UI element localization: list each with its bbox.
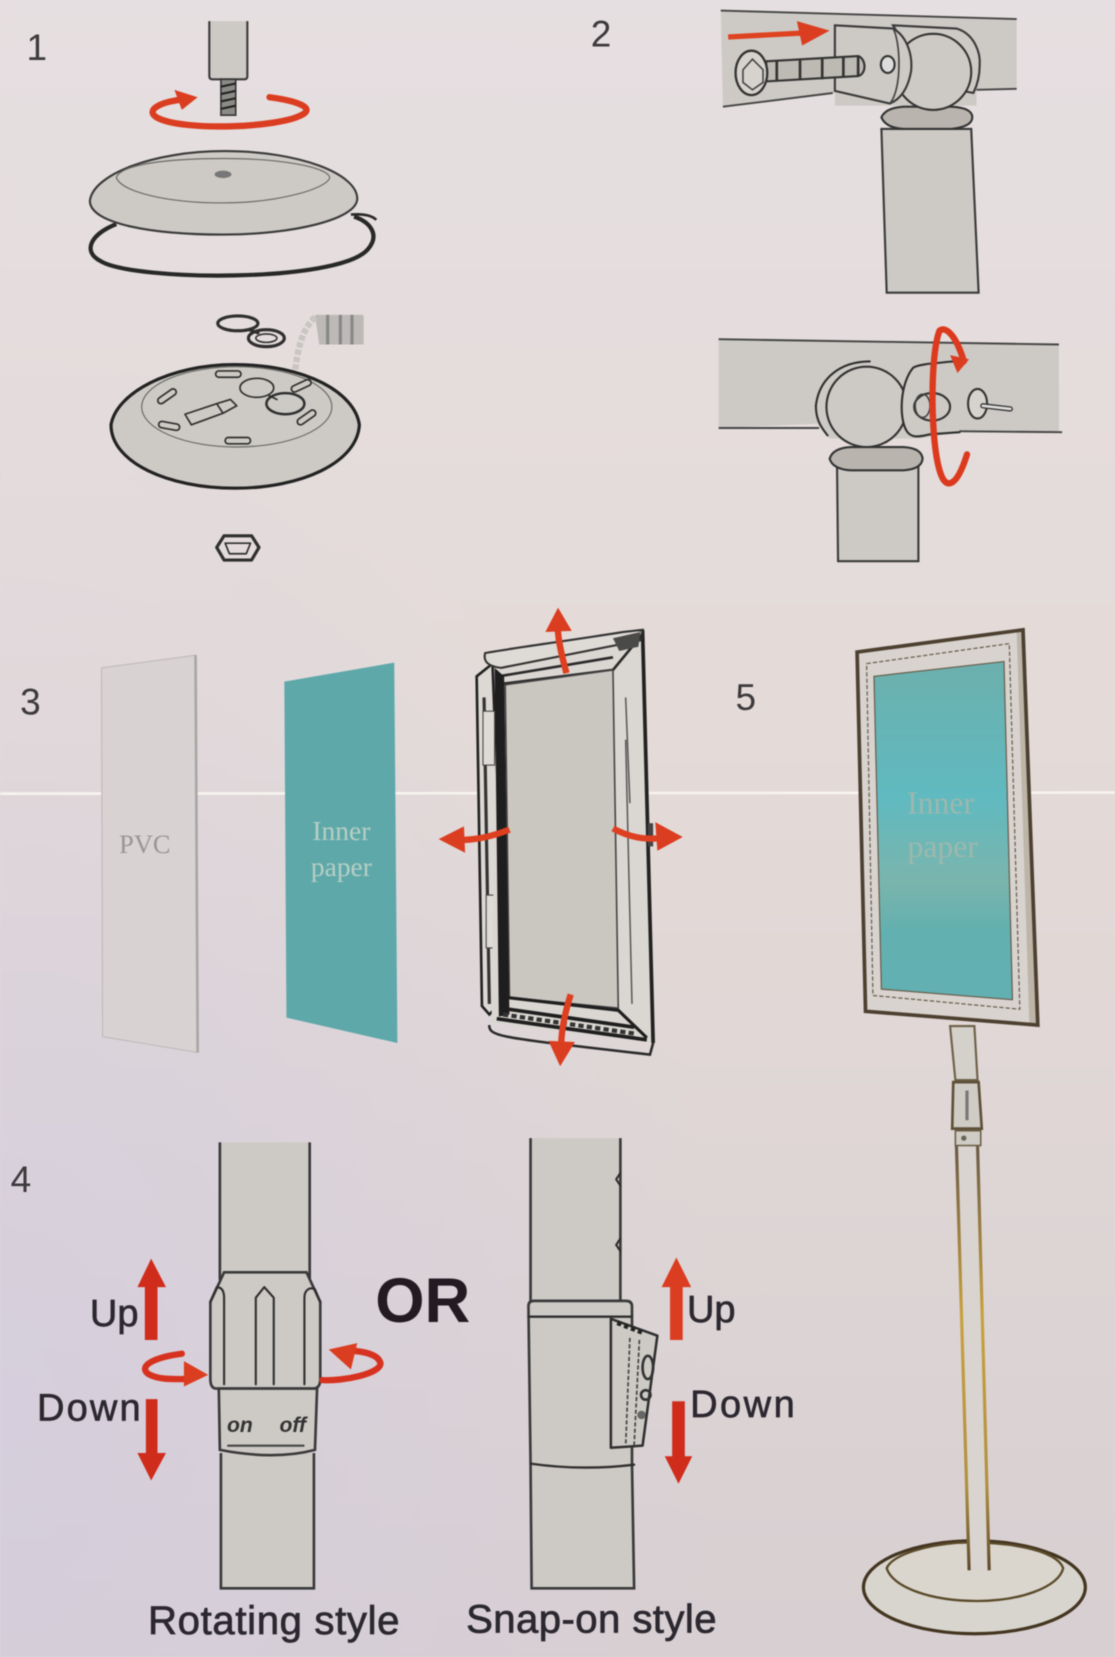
screw tip (968, 389, 1010, 418)
caption: Snap-on style: Snap-on style (466, 1597, 717, 1642)
PVC sheet (102, 655, 198, 1053)
bracket plate (835, 25, 911, 104)
bolt (736, 51, 864, 95)
red arrow up (545, 608, 572, 673)
up arrow, rotating (137, 1259, 166, 1340)
retaining ring (91, 217, 373, 276)
pole (837, 465, 918, 561)
upper tube (950, 1026, 978, 1080)
frame label: Inner (907, 786, 974, 821)
label: OR: OR (375, 1266, 470, 1336)
bottom rail (507, 998, 647, 1038)
red arrow left (439, 826, 509, 853)
frame label: paper (908, 829, 978, 864)
back cup (816, 361, 870, 435)
lower tube (956, 1146, 989, 1570)
left rotation arrow (145, 1354, 208, 1386)
label: Up: Up (90, 1293, 139, 1335)
rotating style pole: on (227, 1414, 253, 1437)
fold crease (0, 793, 1115, 794)
red arrow right (613, 822, 683, 851)
ball joint (895, 34, 971, 110)
rotating style pole (145, 1142, 380, 1588)
inner paper sheet (284, 663, 397, 1043)
step 1 illustration: base assembly (90, 21, 376, 560)
top rail (485, 630, 643, 668)
label: Down snap-on: Down (690, 1384, 795, 1426)
hinge strip (477, 664, 505, 1014)
label: Down: Down (37, 1387, 141, 1429)
collar (881, 107, 972, 129)
assembled sign frame (857, 630, 1038, 1025)
frame bevel (491, 630, 653, 1043)
threaded pole end (209, 21, 247, 115)
up arrow, snap-on (662, 1258, 691, 1340)
knob (952, 1082, 982, 1129)
panel bar (719, 339, 1059, 439)
tube (220, 1142, 310, 1279)
step 2 illustration bottom: tighten bolt (719, 329, 1062, 561)
slotted base plate (111, 365, 359, 488)
dark left band (495, 668, 509, 1017)
step 2 illustration top: bolt into elbow (721, 11, 1017, 293)
inner gray panel (505, 670, 618, 1008)
panel bar (721, 11, 1017, 107)
down arrow, snap-on (665, 1401, 692, 1484)
open snap frame (439, 608, 683, 1066)
inner paper sheet: paper (311, 852, 372, 882)
step number 1: 1 (26, 27, 47, 68)
red arrow down (549, 994, 575, 1066)
bracket end (902, 361, 960, 436)
on/off sleeve (219, 1389, 317, 1455)
collar (830, 447, 923, 470)
rotating style pole: off (279, 1414, 308, 1437)
step number 4: 4 (11, 1159, 31, 1200)
round base (863, 1541, 1085, 1634)
frame label (907, 786, 978, 864)
step number 3: 3 (20, 681, 41, 722)
red push arrow (728, 21, 830, 45)
red rotation arrow (933, 329, 969, 483)
red rotation arrow (153, 90, 307, 126)
side latch (648, 823, 653, 846)
step number 5: 5 (736, 677, 756, 718)
inner paper sheet: Inner (312, 816, 370, 846)
stand pole and base (863, 1026, 1085, 1634)
PVC sheet: PVC (119, 829, 171, 859)
hex nut (217, 536, 259, 560)
weighted disc (90, 151, 357, 235)
back cup (893, 25, 980, 93)
label: Up snap-on: Up (687, 1289, 736, 1331)
right rotation arrow (322, 1343, 380, 1380)
pole (881, 129, 979, 293)
caption: Rotating style: Rotating style (148, 1598, 400, 1643)
snap-on style pole (528, 1138, 657, 1588)
glue tube (294, 315, 364, 389)
washer and spanner (218, 316, 284, 347)
ball joint (826, 367, 907, 447)
twist collar (210, 1272, 320, 1389)
hinge plates (483, 711, 495, 765)
snap lever (611, 1319, 657, 1448)
down arrow, rotating (137, 1399, 166, 1481)
step number 2: 2 (591, 13, 611, 54)
